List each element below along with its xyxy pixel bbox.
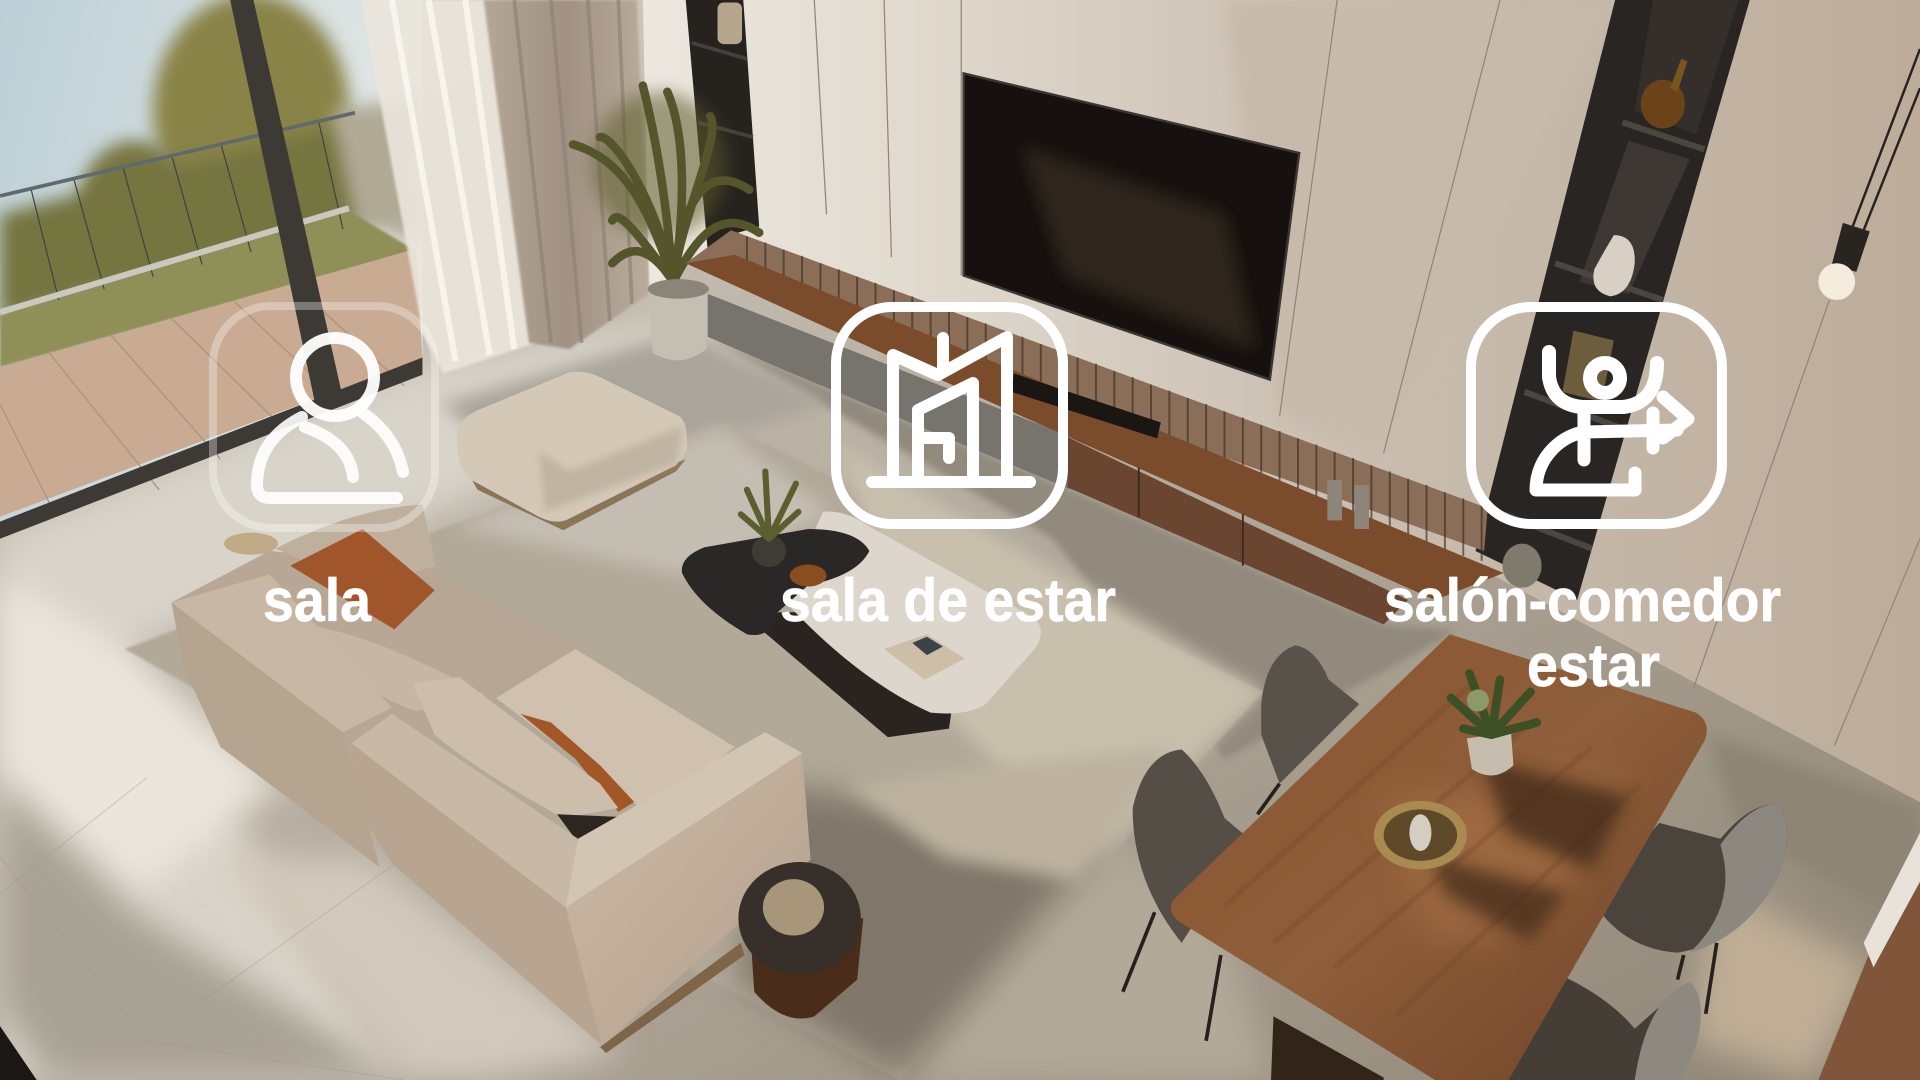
small corner side table	[224, 533, 278, 555]
window view	[0, 0, 422, 527]
door frame lower right	[1818, 845, 1920, 1080]
drape curtain	[484, 0, 649, 349]
left shelf niche	[686, 0, 759, 260]
left wall and panels	[643, 0, 1920, 802]
dining chairs	[1123, 645, 1787, 1080]
door edge highlight	[1864, 833, 1920, 967]
label: sala: sala	[263, 567, 372, 634]
lower left dark corner	[0, 1026, 37, 1080]
right shelf niche	[1476, 0, 1750, 600]
label: estar: estar	[1527, 632, 1660, 699]
TV reflection	[1022, 147, 1255, 349]
icon: building	[836, 307, 1063, 524]
label: sala de estar: sala de estar	[780, 567, 1116, 634]
wood media console	[686, 230, 1504, 624]
ottoman	[457, 372, 687, 530]
window frame	[0, 0, 422, 539]
rug	[125, 422, 1264, 1080]
side table	[738, 862, 863, 1019]
dining table	[1171, 634, 1707, 1080]
icon: person	[213, 306, 435, 528]
sheer curtain	[361, 0, 535, 373]
pendant lamp	[1818, 49, 1920, 300]
label: salón-comedor: salón-comedor	[1384, 567, 1781, 634]
sofa	[171, 504, 811, 1053]
coffee table	[682, 471, 1041, 737]
icon: figure with arrow	[1471, 307, 1722, 524]
TV	[964, 73, 1299, 380]
potted plant	[573, 86, 759, 360]
